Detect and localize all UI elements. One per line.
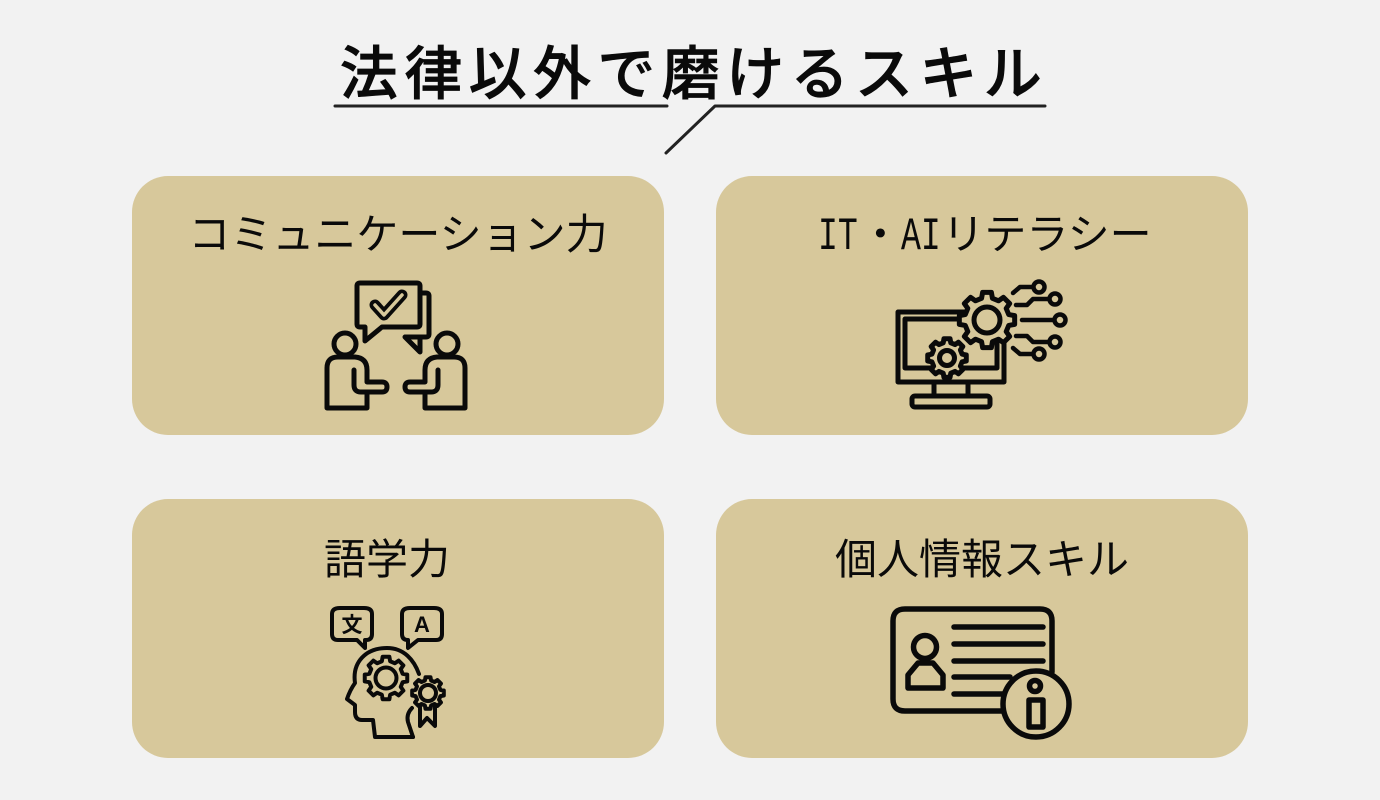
icon: two people talking bbox=[327, 283, 465, 408]
panel: IT and AI literacy: AI bbox=[901, 211, 941, 263]
title: 法律以外で磨けるスキル bbox=[340, 27, 1048, 111]
panel: personal information skill: 個人情報スキル bbox=[835, 526, 1129, 587]
icon: head with gear, translation bubbles and medal: A bbox=[414, 612, 430, 637]
panel: IT and AI literacy: IT bbox=[818, 211, 858, 263]
title speech underline bbox=[335, 106, 1045, 153]
panel: communication skill bbox=[132, 176, 664, 435]
panel: language skill bbox=[132, 499, 664, 758]
panel: communication skill: コミュニケーション力 bbox=[188, 201, 608, 262]
icon: ID card with info badge bbox=[893, 609, 1069, 737]
icon: head with gear, translation bubbles and medal bbox=[332, 608, 444, 737]
panel: language skill: 語学力 bbox=[324, 526, 450, 587]
panel: IT and AI literacy: ・ リテラシー bbox=[859, 201, 1152, 262]
icon: monitor with gears and circuits bbox=[898, 282, 1066, 407]
panel: personal information skill bbox=[716, 499, 1248, 758]
panel: IT and AI literacy bbox=[716, 176, 1248, 435]
icon: head with gear, translation bubbles and medal: 文 bbox=[342, 609, 362, 639]
